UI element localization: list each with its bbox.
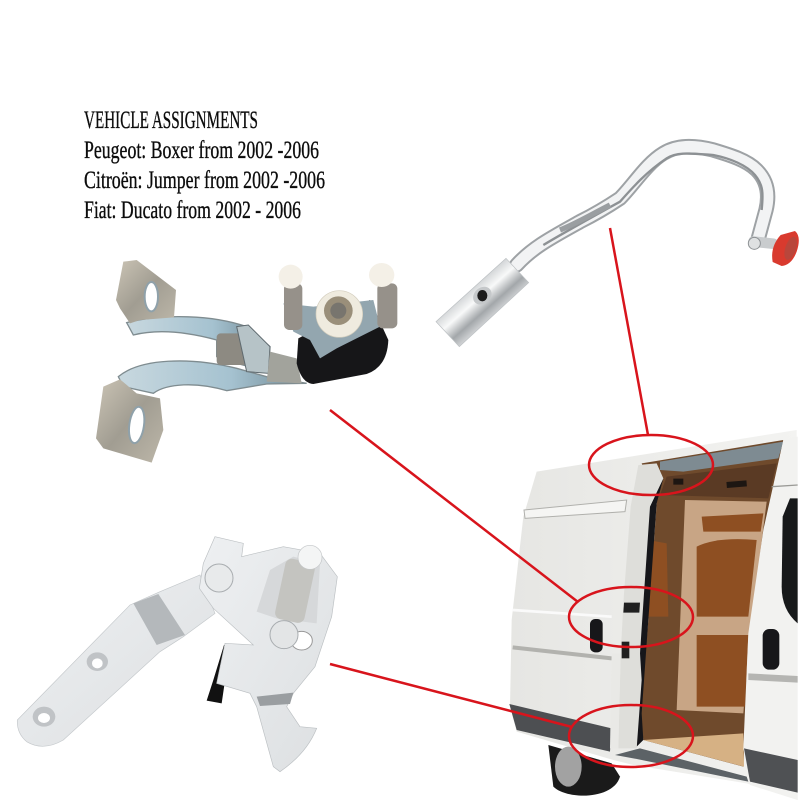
lower mounting plate — [96, 379, 163, 463]
upper mounting plate — [116, 260, 176, 323]
circle: bottom — [569, 705, 693, 767]
dark roof openings — [673, 482, 747, 485]
axle stem — [748, 236, 779, 250]
door track rail — [660, 442, 783, 472]
part: bracket with two nylon guide rollers — [96, 260, 397, 463]
circle: middle — [569, 587, 693, 647]
title: VEHICLE ASSIGNMENTS — [84, 107, 258, 134]
callout lines and circles — [330, 228, 713, 767]
door crease — [524, 500, 627, 518]
line: hinge bracket to bottom of door — [330, 664, 572, 727]
black door handle — [590, 619, 603, 652]
front body and window — [743, 437, 798, 800]
black rubber stop — [297, 300, 388, 384]
black stop — [207, 645, 230, 703]
plywood floor — [643, 733, 744, 767]
plywood panel — [677, 500, 767, 713]
roller and slot — [257, 557, 320, 623]
interior — [640, 440, 783, 767]
part: flat zinc hinge bracket with latch — [17, 537, 337, 772]
front door handle — [763, 629, 779, 670]
long arm — [17, 575, 215, 746]
carrier plate — [283, 300, 380, 358]
dark seal strip — [637, 478, 663, 747]
door seal column — [618, 463, 663, 748]
red wheel — [772, 231, 799, 266]
text: Peugeot: Peugeot: Boxer from 2002 -2006 — [84, 137, 319, 164]
line: upper roller arm to top of door — [610, 228, 648, 435]
lower arm — [118, 361, 307, 393]
centre wheel — [316, 291, 363, 337]
dark lower trim — [509, 704, 612, 752]
heading: vehicle assignments — [84, 107, 325, 224]
front lower trim — [744, 748, 798, 793]
right roller — [377, 283, 397, 328]
wheel — [548, 745, 620, 796]
white body and roofline — [510, 430, 798, 800]
van with open sliding door — [509, 430, 798, 800]
circle: top — [589, 435, 713, 495]
socket tube — [436, 258, 529, 347]
sill — [615, 748, 748, 782]
pivot pin and clamp — [217, 333, 247, 365]
part: upper roller arm with red wheel — [436, 147, 799, 347]
left roller — [284, 283, 302, 330]
latch body — [199, 537, 337, 772]
line: bracket to middle of door — [330, 410, 578, 602]
upper arm — [127, 317, 270, 372]
text: Fiat: Fiat: Ducato from 2002 - 2006 — [84, 197, 301, 224]
rivets — [205, 564, 233, 592]
text: Citroën: Citroën: Jumper from 2002 -2006 — [84, 167, 325, 194]
